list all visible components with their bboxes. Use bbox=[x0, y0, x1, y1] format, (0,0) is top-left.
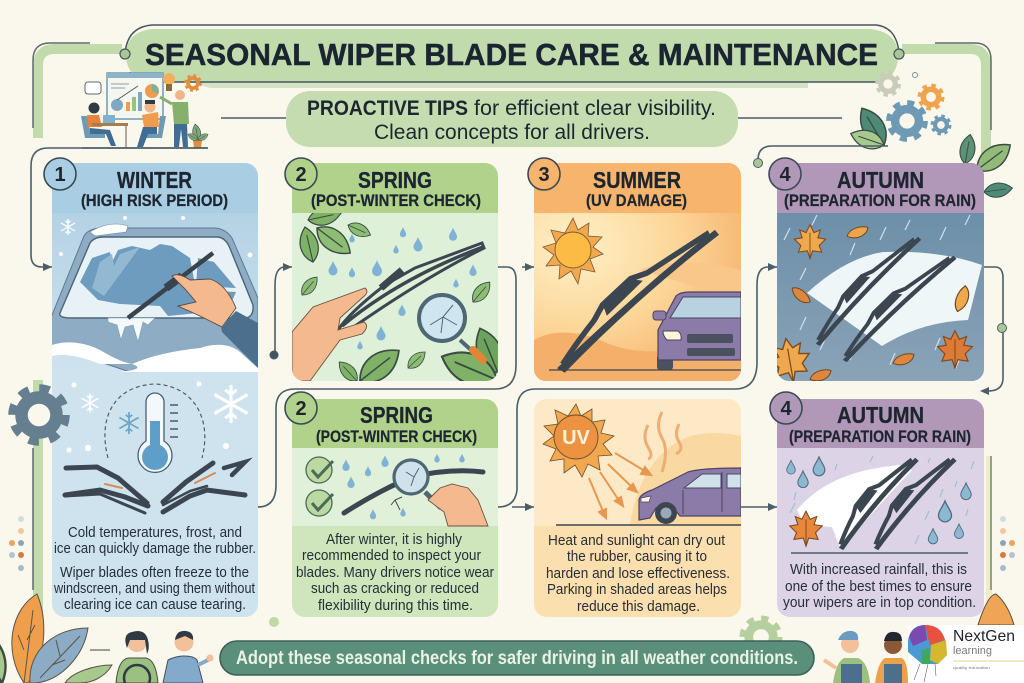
car bbox=[639, 468, 741, 524]
illustration: UV sun and car bbox=[534, 399, 741, 526]
panel: spring top bbox=[285, 158, 509, 394]
autumn heading: (PREPARATION FOR RAIN) bbox=[784, 191, 976, 210]
connector: autumn top to autumn lower bbox=[980, 267, 1006, 395]
summer heading bbox=[586, 167, 687, 210]
spring lower text bbox=[296, 532, 494, 614]
spring heading: (POST-WINTER CHECK) bbox=[311, 191, 481, 210]
icon: mechanic in cap bbox=[824, 631, 870, 683]
decorative dots left bbox=[9, 516, 24, 571]
leaf right bottom bbox=[978, 594, 1014, 625]
autumn lower text: With increased rainfall, this is bbox=[790, 562, 967, 578]
spring lower text: flexibility during this time. bbox=[318, 598, 473, 614]
illustration: hand holding blade with magnifier bbox=[292, 213, 498, 381]
illustration: wipers and rain drops bbox=[787, 449, 974, 551]
spring lower text: recommended to inspect your bbox=[302, 548, 481, 564]
winter text: clearing ice can cause tearing. bbox=[64, 597, 246, 613]
winter text bbox=[53, 525, 256, 613]
autumn lower badge: 4 bbox=[780, 398, 792, 420]
icon: leaves top right bbox=[848, 103, 1016, 199]
logo: NextGen learning: quality education bbox=[953, 665, 990, 670]
logo brain mark bbox=[908, 625, 947, 682]
logo: NextGen learning bbox=[908, 625, 1024, 683]
UV sun bbox=[543, 404, 614, 477]
spring lower text: blades. Many drivers notice wear bbox=[296, 565, 494, 581]
summer lower text: harden and lose effectiveness. bbox=[546, 566, 730, 582]
autumn lower text bbox=[783, 562, 976, 611]
UV sun: UV bbox=[562, 427, 591, 449]
connector: into winter bbox=[31, 148, 208, 271]
panel: autumn top bbox=[766, 158, 984, 386]
icon: mechanic with wrench bbox=[163, 631, 214, 683]
small dot bbox=[269, 617, 279, 627]
icon: gears top right bbox=[877, 72, 950, 139]
blade bbox=[557, 230, 719, 373]
illustration: thermometer with dashed arc bbox=[105, 384, 205, 472]
connector: spring to summer row bbox=[258, 263, 534, 507]
subtitle line 2: Clean concepts for all drivers. bbox=[374, 121, 650, 144]
winter badge: 1 bbox=[54, 164, 66, 186]
panel: summer lower bbox=[534, 399, 741, 617]
summer lower text: Parking in shaded areas helps bbox=[547, 582, 727, 598]
title text: SEASONAL WIPER BLADE CARE & MAINTENANCE bbox=[145, 37, 878, 72]
panel: winter bbox=[44, 158, 258, 617]
autumn lower heading bbox=[789, 402, 971, 446]
winter text: Wiper blades often freeze to the bbox=[60, 565, 249, 581]
frame: right top bracket bbox=[902, 43, 991, 165]
magnifier bbox=[458, 338, 470, 352]
hand bbox=[428, 484, 488, 526]
title banner bbox=[120, 25, 904, 88]
icon: check marks bbox=[306, 457, 333, 516]
summer badge bbox=[528, 158, 560, 190]
spring lower badge bbox=[285, 392, 317, 424]
subtitle line 1: PROACTIVE TIPS bbox=[307, 97, 468, 120]
logo: NextGen learning: NextGen bbox=[953, 628, 1015, 645]
summer lower text: the rubber, causing it to bbox=[567, 549, 707, 565]
logo: NextGen learning: learning bbox=[953, 645, 992, 657]
illustration: wipers in rain with leaves bbox=[766, 213, 984, 386]
autumn lower badge bbox=[770, 392, 802, 424]
icon: leaves bottom left bbox=[0, 594, 112, 683]
summer heading: (UV DAMAGE) bbox=[586, 191, 687, 210]
icon: team meeting at presentation board bbox=[81, 73, 210, 148]
illustration: damaged wiper blades bbox=[65, 462, 245, 513]
spring badge bbox=[285, 158, 317, 190]
icon: large gear left bbox=[13, 389, 65, 441]
spring badge: 2 bbox=[295, 164, 307, 186]
spring lower heading: (POST-WINTER CHECK) bbox=[316, 427, 477, 446]
autumn heading: AUTUMN bbox=[837, 167, 924, 193]
connector: header to autumn bbox=[754, 146, 888, 168]
subtitle line 1: for efficient clear visibility. bbox=[474, 97, 716, 120]
autumn badge bbox=[769, 158, 801, 190]
winter heading: (HIGH RISK PERIOD) bbox=[81, 191, 228, 210]
wiper blade bbox=[128, 253, 213, 318]
winter heading bbox=[81, 167, 228, 210]
frame: left lower strip bbox=[33, 380, 43, 612]
summer badge: 3 bbox=[538, 164, 550, 186]
spring lower text: such as cracking or reduced bbox=[311, 581, 479, 597]
magnifier bbox=[394, 460, 428, 494]
illustration: frozen windscreen with hand and blade bbox=[52, 213, 258, 372]
sun bbox=[543, 218, 603, 284]
summer lower text: Heat and sunlight can dry out bbox=[548, 533, 725, 549]
illustration: snowflakes bbox=[66, 382, 248, 452]
car bbox=[653, 292, 741, 370]
spring lower text: After winter, it is highly bbox=[326, 532, 463, 548]
spring lower heading bbox=[316, 402, 477, 446]
footer text: Adopt these seasonal checks for safer driving in all weather conditions. bbox=[236, 648, 798, 669]
decorative dots right bbox=[1000, 516, 1015, 571]
frame: right lower line bbox=[986, 456, 992, 601]
autumn lower text: your wipers are in top condition. bbox=[783, 595, 976, 611]
subtitle pill bbox=[221, 91, 842, 147]
winter text: Cold temperatures, frost, and bbox=[68, 525, 242, 541]
blade bbox=[337, 243, 484, 334]
autumn lower heading: AUTUMN bbox=[837, 402, 924, 428]
summer lower text: reduce this damage. bbox=[577, 599, 700, 615]
connector: summer row to autumn bbox=[498, 263, 777, 511]
spring lower heading: SPRING bbox=[360, 402, 433, 428]
autumn lower text: one of the best times to ensure bbox=[785, 579, 972, 595]
spring heading: SPRING bbox=[358, 167, 432, 193]
spring lower badge: 2 bbox=[295, 398, 307, 420]
autumn heading bbox=[784, 167, 976, 210]
hand bbox=[292, 288, 367, 381]
icon: second mechanic bbox=[875, 632, 908, 683]
winter heading: WINTER bbox=[117, 167, 192, 193]
winter badge bbox=[44, 158, 76, 190]
illustration: sun, blade and car bbox=[534, 213, 741, 381]
footer banner bbox=[220, 641, 814, 675]
panel: spring lower bbox=[285, 392, 498, 617]
autumn lower heading: (PREPARATION FOR RAIN) bbox=[789, 427, 971, 446]
summer heading: SUMMER bbox=[593, 167, 681, 193]
autumn badge: 4 bbox=[779, 164, 791, 186]
winter text: ice can quickly damage the rubber. bbox=[54, 541, 256, 557]
panel: autumn lower bbox=[770, 392, 984, 617]
frame: left top bracket bbox=[33, 43, 122, 138]
hand bbox=[172, 275, 236, 327]
illustration: checks, blade, magnifier bbox=[306, 454, 488, 526]
panel: summer top bbox=[528, 158, 741, 381]
summer lower text bbox=[546, 533, 730, 615]
subtitle line 1 bbox=[307, 97, 716, 120]
winter text: windscreen, and using them without bbox=[53, 581, 255, 597]
spring heading bbox=[311, 167, 481, 210]
icon: driver with steering wheel bbox=[116, 631, 158, 683]
icon: gear behind footer bbox=[743, 619, 779, 655]
sun ray arrows bbox=[589, 453, 651, 518]
